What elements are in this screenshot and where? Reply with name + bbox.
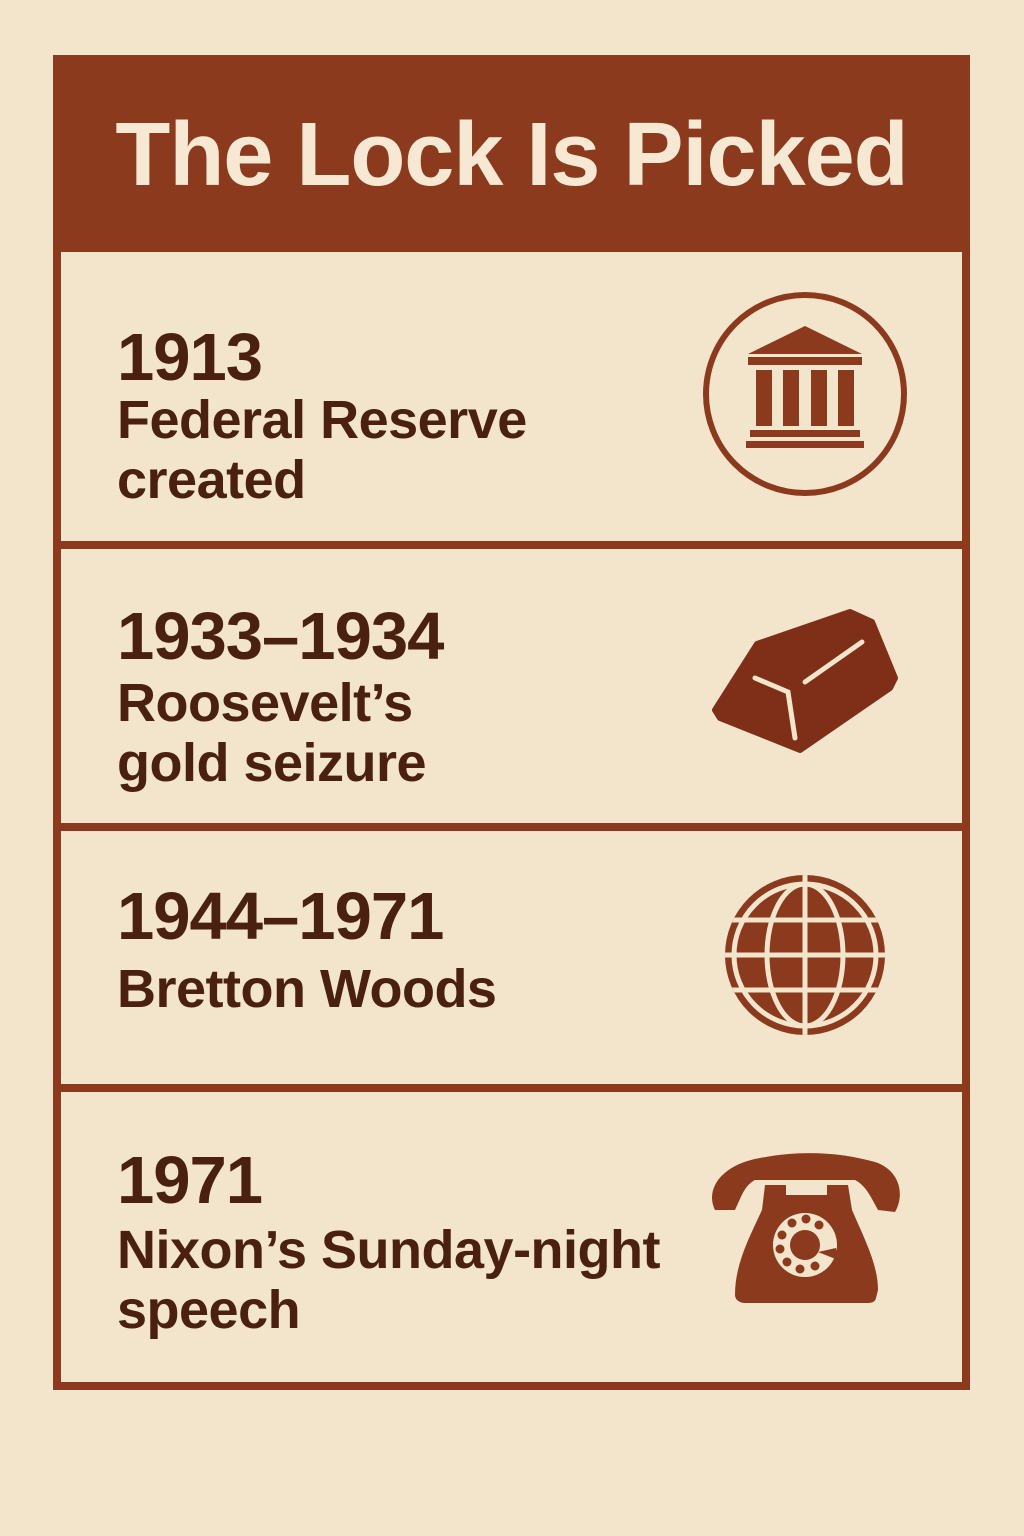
icon: telephone bbox=[712, 1153, 900, 1303]
desc: Federal Reserve created: Federal Reserve bbox=[117, 390, 527, 450]
desc: Federal Reserve created bbox=[117, 390, 527, 510]
row 2: 1933-1934 bbox=[117, 599, 444, 793]
title banner bbox=[53, 55, 970, 252]
desc: Roosevelt's gold seizure: gold seizure bbox=[117, 733, 426, 793]
frame bbox=[53, 55, 970, 1390]
year 1913: 1913 bbox=[117, 320, 262, 395]
icon: bank building bbox=[703, 292, 907, 496]
icon: gold bar bbox=[712, 609, 898, 753]
desc: Nixon's Sunday-night speech: Nixon’s Sunday-night bbox=[117, 1220, 660, 1280]
desc: Bretton Woods: Bretton Woods bbox=[117, 959, 496, 1019]
row separators bbox=[53, 541, 970, 549]
row 4: 1971 bbox=[117, 1143, 660, 1340]
year 1933–1934: 1933–1934 bbox=[117, 599, 443, 674]
desc: Roosevelt's gold seizure bbox=[117, 673, 426, 793]
year 1944–1971: 1944–1971 bbox=[117, 879, 443, 954]
row 1: 1913 bbox=[117, 320, 527, 510]
desc: Federal Reserve created: created bbox=[117, 450, 306, 510]
desc: Nixon's Sunday-night speech bbox=[117, 1220, 660, 1340]
row 3: 1944-1971 bbox=[117, 879, 496, 1019]
year 1971: 1971 bbox=[117, 1143, 262, 1218]
desc: Nixon's Sunday-night speech: speech bbox=[117, 1280, 300, 1340]
desc: Roosevelt's gold seizure: Roosevelt’s bbox=[117, 673, 413, 733]
icon: globe bbox=[725, 875, 885, 1035]
title banner: The Lock Is Picked bbox=[115, 105, 908, 205]
